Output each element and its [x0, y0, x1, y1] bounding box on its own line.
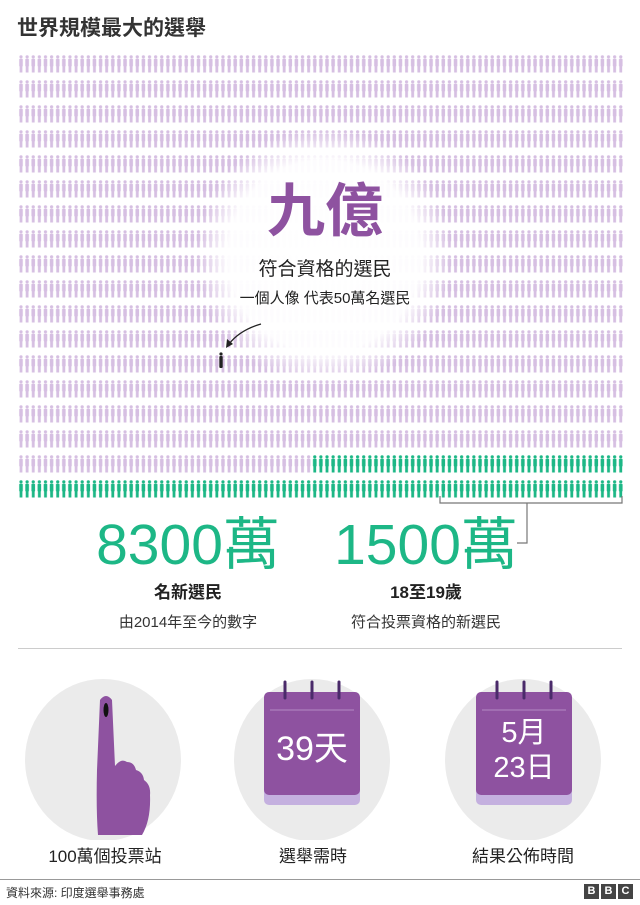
stat: 83 million	[96, 513, 280, 631]
callout: 900 million: 符合資格的選民	[258, 259, 392, 280]
stat: 83 million: 由2014年至今的數字	[119, 614, 257, 631]
bracket	[440, 496, 622, 543]
stat: 83 million: 名新選民	[154, 583, 222, 602]
icon: calendar 39 days: 39天	[276, 730, 348, 768]
logo: BBC: B	[588, 885, 595, 897]
panel: election duration	[234, 679, 390, 866]
title: 世界規模最大的選舉	[17, 17, 206, 40]
label: 結果公佈時間	[472, 847, 574, 866]
people grid chart	[18, 55, 623, 544]
panel: results date	[445, 679, 601, 866]
icon: calendar May 23	[445, 679, 601, 840]
stat: 15 million	[334, 513, 518, 631]
stat: 15 million: 18至19歲	[390, 583, 462, 602]
callout: 900 million: 一個人像 代表50萬名選民	[240, 290, 410, 307]
source footer: 資料來源: 印度選舉事務處	[6, 886, 145, 900]
logo: BBC	[584, 884, 633, 899]
icon: single black figure	[219, 352, 223, 368]
icon: inked finger	[25, 679, 181, 840]
stat: 15 million: 1500萬	[334, 513, 518, 577]
label: 100萬個投票站	[48, 847, 162, 866]
icon: calendar May 23: 23日	[493, 752, 555, 784]
logo: BBC: C	[622, 885, 629, 897]
icon: calendar 39 days	[234, 679, 390, 840]
icon: calendar May 23: 5月	[501, 717, 547, 749]
new voters highlighted figures	[18, 455, 624, 500]
arrow	[229, 324, 261, 344]
panel: polling stations	[25, 679, 181, 866]
callout: 900 million: 九億	[267, 179, 383, 244]
stat: 15 million: 符合投票資格的新選民	[351, 614, 501, 631]
label: 選舉需時	[279, 847, 347, 866]
stat: 83 million: 8300萬	[96, 513, 280, 577]
callout: 900 million	[240, 179, 410, 307]
logo: BBC: B	[605, 885, 612, 897]
